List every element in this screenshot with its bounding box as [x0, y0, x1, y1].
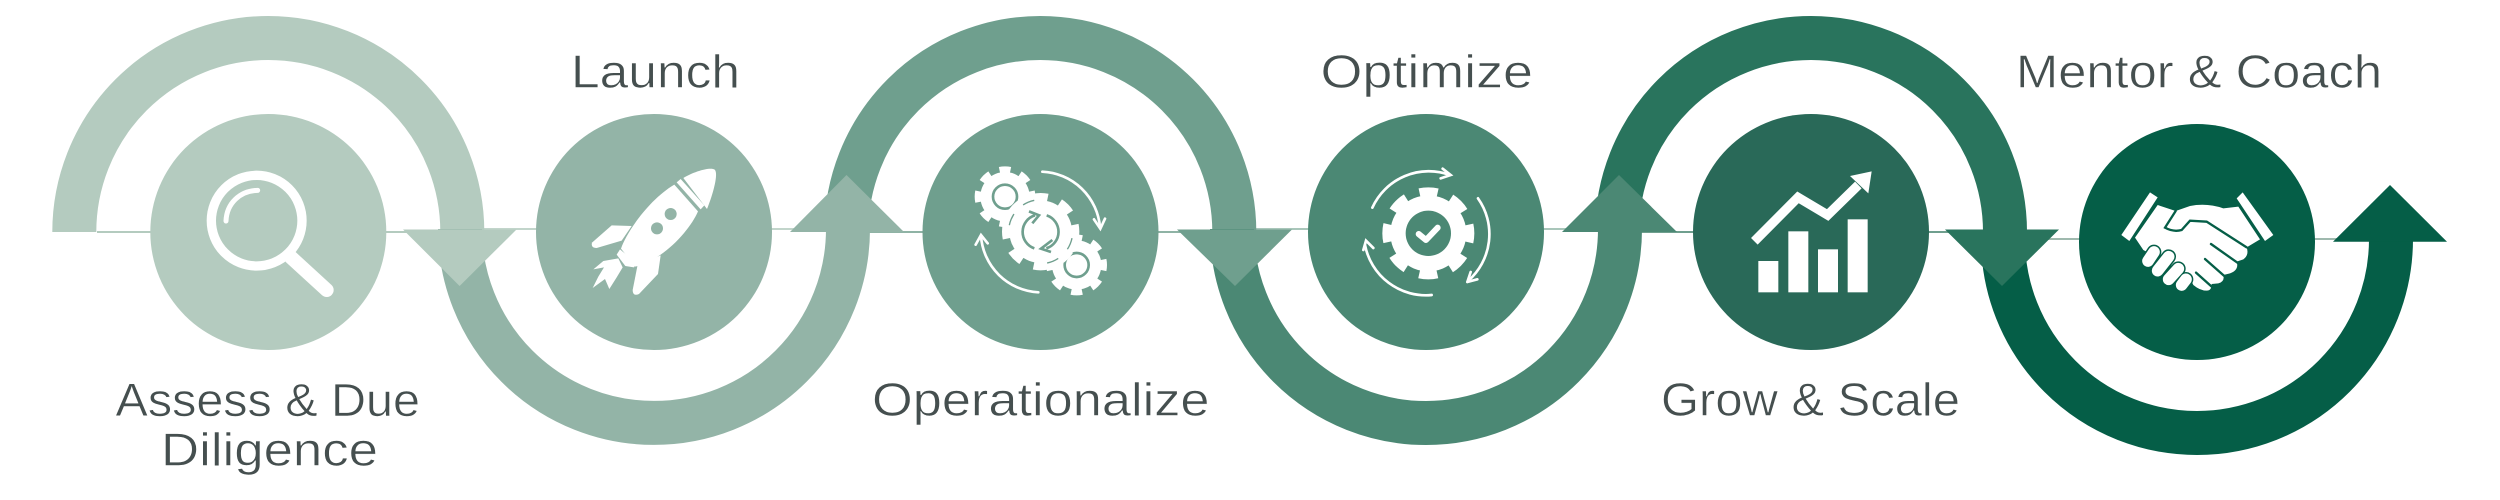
icon: magnifying glass	[211, 175, 327, 290]
label: assess & due diligence: Diligence	[161, 424, 378, 476]
arrowhead: step 1 down	[403, 230, 516, 286]
arrowhead: step 4 up	[1562, 175, 1677, 232]
circle: operationalize	[922, 114, 1158, 350]
arc: step 2	[460, 229, 848, 423]
label: mentor & coach: Mentor & Coach	[2016, 46, 2382, 98]
circle: launch	[536, 114, 772, 350]
icon: gears with cycle arrows	[976, 170, 1105, 292]
arc: step 3	[846, 38, 1234, 232]
circle: mentor	[2079, 124, 2315, 360]
arrowhead: step 5 down	[1945, 230, 2059, 286]
arc: step 6	[2003, 239, 2391, 433]
circle: optimize	[1308, 114, 1544, 350]
circle: grow	[1693, 114, 1929, 350]
arc: step 1	[74, 38, 462, 232]
label: operationalize: Operationalize	[872, 374, 1210, 426]
arc: step 5	[1617, 38, 2005, 232]
icon: rocket	[592, 169, 716, 295]
arrowhead: step 2 up	[790, 175, 904, 232]
label: grow & scale: Grow & Scale	[1661, 374, 1960, 426]
circle: assess	[150, 114, 386, 350]
icon: handshake	[2121, 192, 2273, 291]
icon: gear with check	[1363, 169, 1489, 295]
arc: step 4	[1232, 229, 1620, 423]
arrowhead: step 6 up	[2333, 185, 2447, 242]
icon: growth chart	[1754, 171, 1872, 292]
arrowhead: step 3 down	[1177, 230, 1292, 286]
label: optimize: Optimize	[1320, 46, 1533, 98]
label: launch: Launch	[571, 46, 740, 98]
label: assess & due diligence: Assess & Due	[116, 374, 420, 426]
label: assess & due diligence	[116, 374, 420, 476]
